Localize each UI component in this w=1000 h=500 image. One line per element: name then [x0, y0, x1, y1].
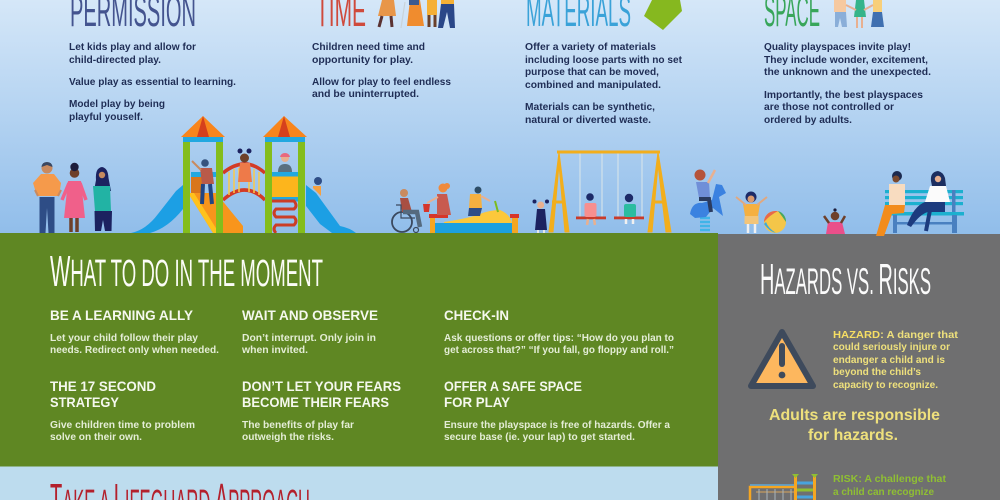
tip: wait and observe: when invited. — [241, 344, 308, 356]
illustration: child on right slide — [313, 177, 322, 196]
text block: permission: Value play as essential to learning. — [69, 76, 236, 88]
illustration: little girl in navy dress — [532, 200, 549, 233]
tip: wait and observe: WAIT AND OBSERVE — [242, 307, 378, 323]
ground strip — [0, 233, 718, 236]
text block: space: They include wonder, excitement, — [764, 54, 928, 66]
tip: check-in — [444, 307, 674, 356]
panel: permission — [69, 0, 236, 123]
text block: risk definition: RISK: A challenge that — [833, 473, 946, 485]
tip: offer a safe space for play — [444, 378, 670, 443]
text block: space: ordered by adults. — [764, 114, 852, 126]
illustration: child with arms raised — [736, 192, 767, 233]
text block: hazard definition: could seriously injure or — [833, 341, 950, 353]
panel: space — [764, 0, 931, 126]
illustration: baby — [824, 208, 845, 234]
text block: space: Quality playspaces invite play! — [764, 41, 911, 53]
callout: adults are responsible for hazards — [769, 407, 940, 444]
text block: permission: playful youself. — [69, 111, 143, 123]
illustration: child in right tower — [278, 153, 292, 172]
text block: risk definition: a child can recognize — [833, 486, 934, 498]
illustration: girl on bridge — [238, 148, 252, 182]
text block: space: are those not controlled or — [764, 101, 894, 113]
icon: green material shape — [644, 0, 682, 30]
illustration: three adults — [33, 162, 112, 233]
panel: time — [312, 0, 455, 100]
tip: offer a safe space for play: OFFER A SAFE SPACE — [444, 378, 582, 394]
tip: wait and observe — [241, 307, 378, 356]
text block: hazard definition — [833, 329, 959, 391]
tip: the 17 second strategy: solve on their own. — [50, 431, 142, 443]
text block: permission — [69, 41, 236, 123]
text block: hazard definition: capacity to recognize. — [833, 379, 938, 391]
text block: time: Children need time and — [312, 41, 425, 53]
panel: what to do in the moment — [0, 234, 718, 466]
tip: offer a safe space for play: FOR PLAY — [444, 394, 511, 410]
illustration: bench with two adults — [876, 171, 964, 236]
icon: warning triangle — [751, 332, 813, 386]
tip: check-in: CHECK-IN — [444, 307, 509, 323]
illustration: child on spring rider — [690, 170, 726, 236]
tip: offer a safe space for play: secure base (ie. your lap) to get started. — [444, 431, 635, 443]
illustration: play structure with slides — [131, 116, 356, 233]
text block: materials — [525, 41, 682, 126]
panel: hazards vs risks — [718, 234, 1000, 500]
tip: don't let your fears become their fears: BECOME THEIR FEARS — [242, 394, 389, 410]
text block: time: and be uninterrupted. — [312, 88, 419, 100]
tip: don't let your fears become their fears: outweigh the risks. — [242, 431, 334, 443]
tip: check-in: get across that?” “If you fall, go floppy and roll.” — [444, 344, 674, 356]
text block: hazard definition: HAZARD : A danger that — [833, 329, 959, 341]
text block: time: Allow for play to feel endless — [312, 76, 451, 88]
text block: space: Importantly, the best playspaces — [764, 89, 923, 101]
illustration: sandbox with children — [423, 183, 519, 233]
tip: the 17 second strategy: Give children time to problem — [50, 419, 195, 431]
text block: time: opportunity for play. — [312, 54, 413, 66]
tip: be a learning ally: needs. Redirect only when needed. — [50, 344, 219, 356]
heading: what to do in the moment: WHAT TO DO IN THE MOMENT — [50, 247, 323, 296]
text block: time — [312, 41, 451, 100]
tip: wait and observe: Don’t interrupt. Only join in — [242, 332, 376, 344]
text block: hazard definition: beyond the child’s — [833, 366, 921, 378]
illustration: swing set — [549, 152, 671, 232]
tip: be a learning ally — [50, 307, 219, 356]
text block: hazard definition: endanger a child and is — [833, 354, 945, 366]
text block: permission: Let kids play and allow for — [69, 41, 196, 53]
icon: group of people walking — [378, 0, 455, 28]
text block: materials: purpose that can be moved, — [525, 66, 659, 78]
tip: the 17 second strategy: STRATEGY — [50, 394, 120, 410]
callout: adults are responsible for hazards: Adults are responsible — [769, 407, 940, 424]
tip: don't let your fears become their fears: The benefits of play far — [242, 419, 354, 431]
tip: check-in: Ask questions or offer tips: “How do you plan to — [444, 332, 674, 344]
illustration: wheelchair user — [392, 189, 420, 232]
heading: hazards vs risks: HAZARDS VS. RISKS — [760, 255, 931, 304]
text block: materials: combined and manipulated. — [525, 79, 661, 91]
text block: permission: Model play by being — [69, 98, 165, 110]
panel: sky background — [0, 0, 1000, 236]
tip: don't let your fears become their fears — [242, 378, 401, 443]
panel: materials — [525, 0, 682, 126]
tip: offer a safe space for play: Ensure the playspace is free of hazards. Offer a — [444, 419, 670, 431]
icon: people holding hands — [834, 0, 884, 28]
text block: space — [764, 41, 931, 126]
text block: risk definition — [833, 473, 946, 498]
icon: climbing frame — [750, 474, 818, 500]
tip: the 17 second strategy — [50, 378, 195, 443]
tip: don't let your fears become their fears: DON’T LET YOUR FEARS — [242, 378, 401, 394]
tip: the 17 second strategy: THE 17 SECOND — [50, 378, 156, 394]
tip: be a learning ally: BE A LEARNING ALLY — [50, 307, 194, 323]
illustration: beach ball — [764, 211, 786, 233]
text block: materials: Offer a variety of materials — [525, 41, 656, 53]
text block: materials: Materials can be synthetic, — [525, 101, 655, 113]
text block: materials: including loose parts with no set — [525, 54, 682, 66]
illustration: playground scene — [33, 116, 964, 236]
illustration: child on slide ladder — [192, 159, 214, 204]
text block: permission: child-directed play. — [69, 54, 161, 66]
text block: materials: natural or diverted waste. — [525, 114, 651, 126]
text block: space: the unknown and the unexpected. — [764, 66, 931, 78]
panel: take a lifeguard approach — [0, 466, 718, 500]
tip: be a learning ally: Let your child follow their play — [50, 332, 198, 344]
callout: adults are responsible for hazards: for hazards. — [808, 427, 898, 444]
